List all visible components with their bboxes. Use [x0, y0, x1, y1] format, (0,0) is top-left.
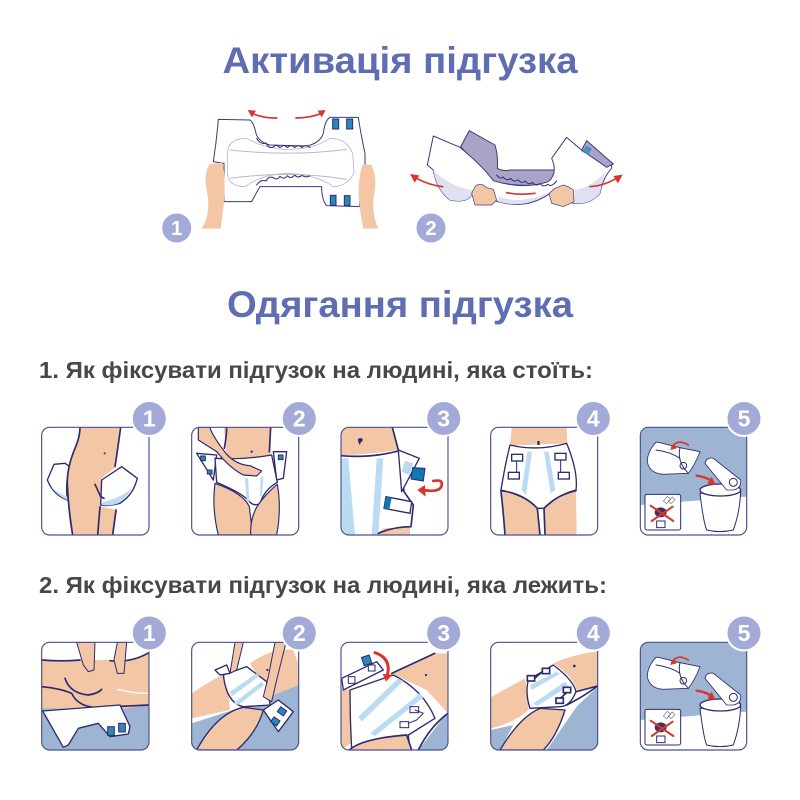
title: putting on: Одягання підгузка	[227, 284, 573, 325]
badge: 4: 4	[587, 406, 600, 432]
panel: lying step 4	[491, 616, 611, 750]
badge: 3: 3	[437, 406, 450, 432]
badge: 4: 4	[587, 620, 600, 646]
panel: standing step 5	[640, 401, 762, 535]
badge: 1: 1	[143, 620, 156, 646]
badge: top 1: 1	[171, 218, 182, 240]
panel: lying step 5	[640, 616, 762, 750]
panel: lying step 2	[192, 616, 317, 750]
heading: standing person: 1. Як фіксувати підгузок на людині, яка стоїть:	[39, 357, 593, 383]
panel: standing step 4	[491, 401, 611, 535]
title: activation: Активація підгузка	[222, 40, 578, 81]
badge: top 1	[161, 212, 192, 244]
badge: 5: 5	[738, 406, 751, 432]
badge: 3: 3	[437, 620, 450, 646]
illustration: stretching the diaper crosswise	[410, 131, 623, 207]
panel: standing step 1	[42, 401, 167, 535]
badge: 5: 5	[738, 620, 751, 646]
badge: top 2	[416, 212, 446, 244]
badge: 2: 2	[293, 406, 306, 432]
panel: lying step 3	[341, 616, 461, 750]
badge: 1: 1	[143, 406, 156, 432]
panel: lying step 1	[42, 616, 167, 750]
heading: lying person: 2. Як фіксувати підгузок на людині, яка лежить:	[39, 572, 607, 598]
panel: standing step 2	[192, 401, 317, 535]
illustration: stretching the diaper lengthwise	[202, 110, 378, 229]
panel: standing step 3	[341, 401, 461, 535]
badge: top 2: 2	[425, 218, 437, 240]
badge: 2: 2	[293, 620, 306, 646]
